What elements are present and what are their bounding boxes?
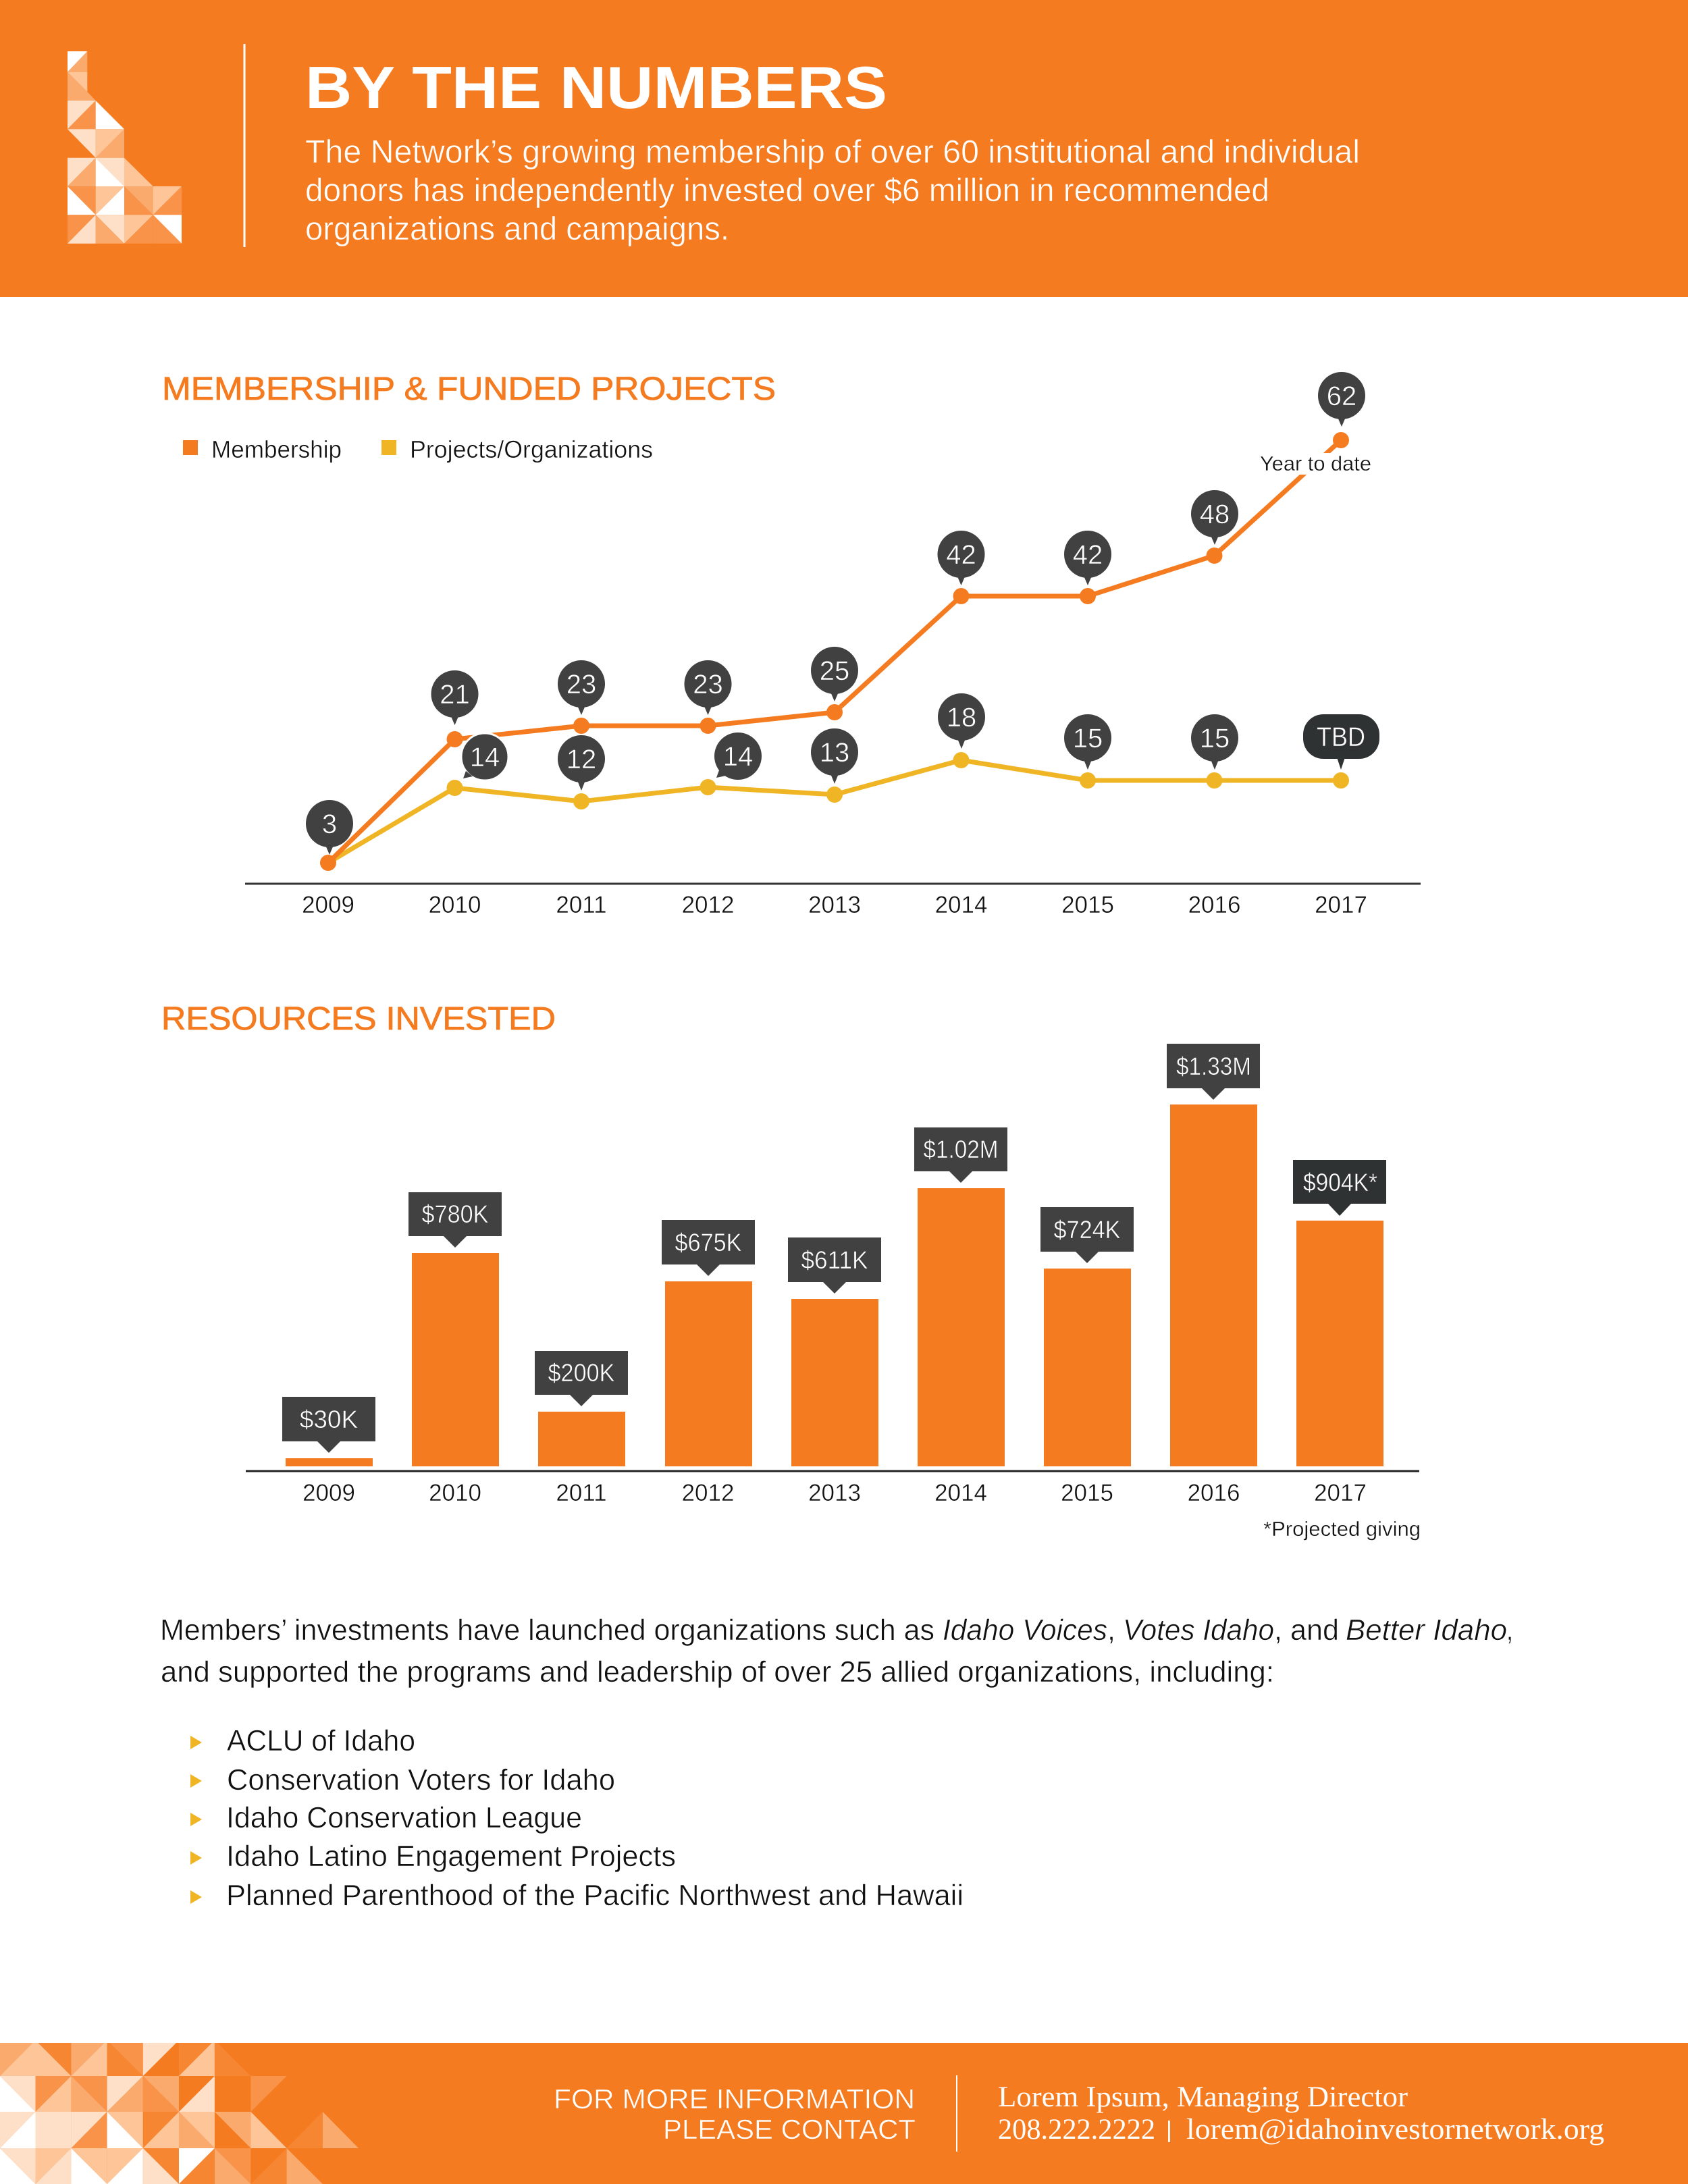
text block: investments paragraph [160,1614,1513,1688]
callouts: projects values: 12 [566,745,596,774]
value labels: $611K [801,1246,868,1274]
text block: header intro: The Network’s growing membership of over 60 institutional and individual [305,134,1360,170]
text block: contact prompt: FOR MORE INFORMATION [554,2083,915,2114]
text block: contact details: lorem@idahoinvestornetwork.org [1186,2114,1604,2146]
x axis year labels [302,892,1367,918]
value labels: $904K* [1303,1169,1377,1196]
text block: contact details [998,2081,1604,2146]
text block: contact prompt: PLEASE CONTACT [663,2114,916,2145]
x axis year labels: 2014 [935,892,987,918]
value labels: $1.02M [924,1136,998,1163]
text block: contact prompt [554,2083,916,2145]
text block: investments paragraph: , [1107,1614,1115,1647]
callouts: membership values: 23 [566,670,596,699]
x axis year labels: 2010 [429,892,481,918]
bars [286,1104,1383,1466]
text block: header intro: donors has independently invested over $6 million in recommended [305,173,1269,209]
panel: footer banner [0,2040,1688,2184]
x axis year labels: 2013 [808,1480,861,1506]
annotation: year to date: Year to date [1260,452,1371,475]
callouts: projects values: 15 [1200,724,1230,753]
text block: investments paragraph: Idaho Voices [943,1614,1107,1647]
bar chart: resources invested [246,1044,1421,1541]
x axis year labels: 2011 [556,1480,607,1506]
x axis year labels: 2017 [1315,892,1367,918]
x axis year labels: 2010 [429,1480,481,1506]
value labels [282,1044,1386,1453]
decorative triangle pattern [0,2040,359,2184]
text block: investments paragraph: , and [1274,1614,1339,1647]
x axis year labels [302,1480,1367,1506]
callouts: projects values: 14 [470,743,500,772]
x axis year labels: 2015 [1061,1480,1113,1506]
x axis year labels: 2009 [302,1480,355,1506]
x axis year labels: 2012 [682,1480,734,1506]
title: BY THE NUMBERS [305,54,887,121]
callouts: membership values: 48 [1200,500,1230,529]
text block: header intro: organizations and campaigns. [305,211,729,247]
callouts: membership values: 23 [693,670,723,699]
x axis year labels: 2011 [556,892,607,918]
list: allied organizations: Planned Parenthood of the Pacific Northwest and Hawaii [226,1879,964,1912]
x axis year labels: 2016 [1188,1480,1240,1506]
callouts: projects values: 13 [820,738,849,768]
list: allied organizations [190,1724,964,1912]
x axis year labels: 2012 [682,892,734,918]
callouts: membership values: 21 [440,680,470,710]
list: allied organizations: ACLU of Idaho [227,1724,415,1757]
callouts: projects values: 14 [723,742,753,772]
text block: investments paragraph: Members’ investments have launched organizations such as [160,1614,934,1647]
text block: investments paragraph: Better Idaho [1346,1614,1507,1647]
list: allied organizations: Idaho Conservation League [226,1801,582,1834]
callouts: projects values: 15 [1073,724,1103,753]
callouts: projects values [461,693,1379,791]
callouts: membership values: 42 [946,540,976,570]
text block: contact details: 208.222.2222 [998,2114,1155,2146]
text block: investments paragraph: , [1506,1614,1513,1647]
heading: membership and funded projects: MEMBERSHIP & FUNDED PROJECTS [162,371,776,407]
x axis year labels: 2009 [302,892,354,918]
value labels: $30K [300,1406,359,1433]
x axis year labels: 2017 [1314,1480,1367,1506]
callouts: membership values: 3 [322,809,337,839]
callouts: membership values: 25 [820,656,849,686]
chart axis [245,883,1421,884]
line: membership [320,432,1349,871]
callouts: membership values: 62 [1327,381,1356,411]
x axis year labels: 2015 [1061,892,1114,918]
text block: contact details: Lorem Ipsum, Managing Director [998,2081,1408,2113]
value labels: $200K [548,1359,615,1387]
list: allied organizations: Conservation Voters for Idaho [227,1763,615,1796]
callouts: projects values: 18 [947,703,976,733]
legend [183,435,653,463]
value labels: $1.33M [1176,1053,1251,1080]
legend: Projects/Organizations [410,435,653,463]
legend: Membership [211,435,342,463]
footer divider line [956,2075,957,2152]
callouts: membership values [306,372,1365,855]
x axis year labels: 2016 [1188,892,1240,918]
value labels: $675K [675,1229,742,1256]
header divider line [243,44,246,247]
text block: contact details: | [1166,2117,1172,2143]
callouts: membership values: 42 [1073,540,1103,570]
line: projects and organizations [328,752,1349,863]
list: allied organizations: Idaho Latino Engagement Projects [226,1840,676,1873]
x axis year labels: 2014 [934,1480,987,1506]
icon: Idaho state triangle logo [68,51,182,244]
heading: resources invested: RESOURCES INVESTED [161,1001,556,1037]
callouts: projects values: TBD [1317,722,1365,752]
panel: header banner [0,0,1688,297]
text block: header intro [305,134,1360,247]
value labels: $724K [1053,1216,1121,1244]
chart axis [246,1470,1419,1472]
footnote: *Projected giving [1263,1517,1421,1541]
text block: investments paragraph: and supported the programs and leadership of over 25 allied organizations, including: [161,1655,1274,1688]
text block: investments paragraph: Votes Idaho [1123,1614,1274,1647]
line chart: membership and projects [245,372,1421,918]
x axis year labels: 2013 [808,892,861,918]
value labels: $780K [421,1200,489,1228]
